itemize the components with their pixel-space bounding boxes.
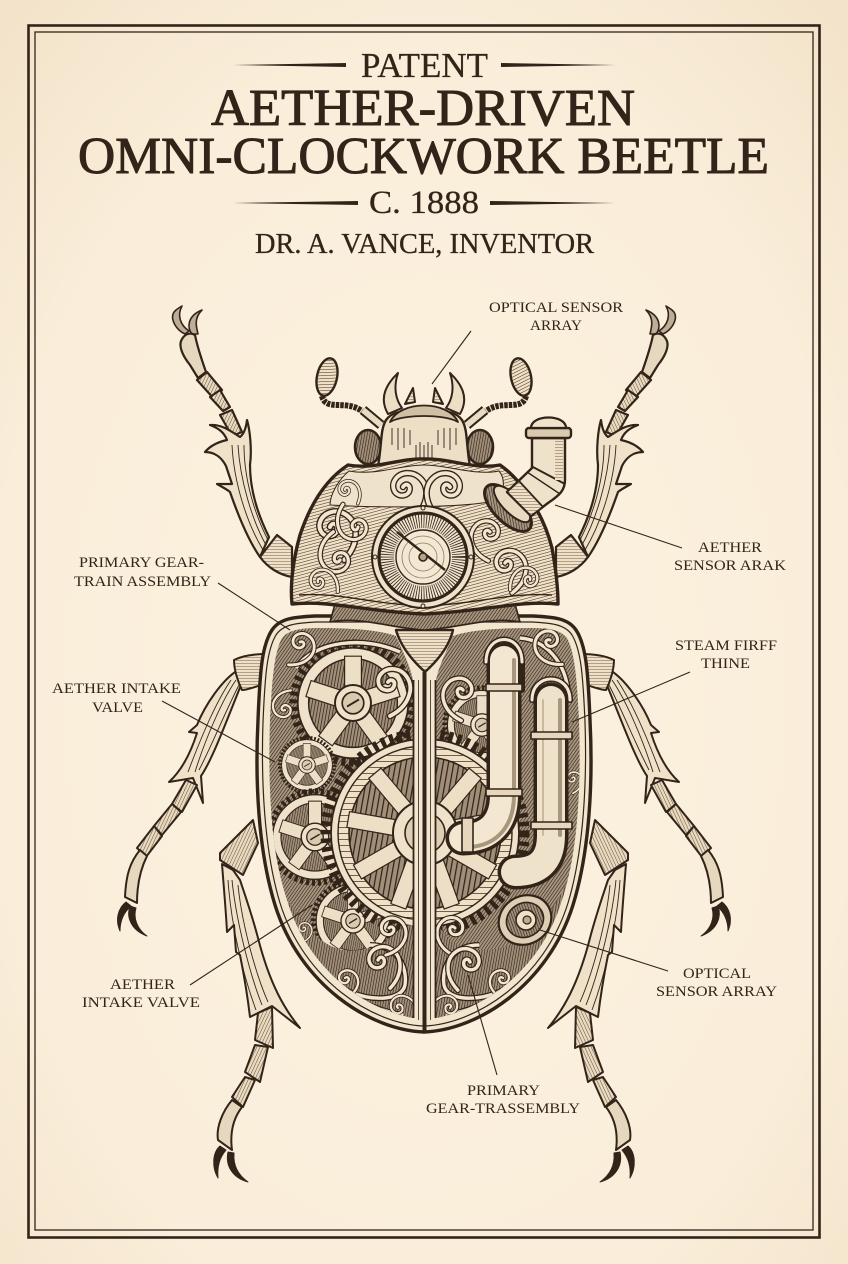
callout: optical sensor array (top): ARRAY [530,318,582,334]
gears [270,644,524,960]
callout: aether intake valve (lower) [82,905,312,1011]
head [313,356,535,466]
callout: primary gear-train assembly: PRIMARY GEAR- [79,555,204,571]
callout: steam thine: STEAM FIRFF [675,638,777,654]
middle left leg [118,654,267,936]
steam pipes [463,640,570,872]
scutellum [396,630,453,672]
callout: steam thine [572,638,777,722]
title line one: AETHER-DRIVEN [211,80,635,137]
eyes [355,430,381,464]
inventor: DR. A. VANCE, INVENTOR [255,229,594,260]
callout: aether intake valve (upper) [52,681,275,762]
elytra shell [257,616,591,1032]
title line two: OMNI-CLOCKWORK BEETLE [78,128,769,185]
callout: primary gear assembly (bottom): PRIMARY [467,1083,540,1099]
filigree scrolls [308,470,540,598]
bottom scroll work [270,627,582,1018]
shell outline [257,616,591,1032]
callout: aether sensor array [555,505,786,574]
callout: primary gear assembly (bottom): GEAR-TRASSEMBLY [426,1101,580,1117]
pronotum shell [291,459,558,614]
front pipe [477,418,571,539]
decorative rules [233,63,615,205]
callout: primary gear-train assembly [74,555,290,630]
callout: primary gear assembly (bottom) [426,975,580,1117]
pipe bands [462,684,572,852]
callout: aether sensor array: SENSOR ARAK [674,558,786,574]
spiral boiler [498,894,552,946]
date: C. 1888 [369,185,479,221]
right legs [548,306,730,1182]
mandibles [384,373,464,414]
callout: aether sensor array: AETHER [698,540,762,556]
callout: aether intake valve (upper): VALVE [92,700,143,716]
left legs [118,306,300,1182]
elytra mechanical interior [269,628,580,1018]
antennae [313,356,535,425]
pressure gauge [372,506,474,608]
patent heading: PATENT [361,46,488,85]
rear left leg [214,820,300,1182]
callout: optical sensor array (lower): SENSOR ARRAY [656,984,777,1000]
callout: aether intake valve (lower): INTAKE VALVE [82,995,200,1011]
callout: primary gear-train assembly: TRAIN ASSEMBLY [74,574,211,590]
central seam [413,672,436,1032]
callout: optical sensor array (top) [432,300,623,384]
callout: aether intake valve (lower): AETHER [110,977,175,993]
callout: steam thine: THINE [701,656,750,672]
head capsule [378,411,470,466]
front left leg [173,306,292,577]
neck band [330,604,520,630]
callout: aether intake valve (upper): AETHER INTAKE [52,681,181,697]
callout: optical sensor array (lower) [540,930,777,1000]
callout: optical sensor array (top): OPTICAL SENSOR [489,300,623,316]
callout: optical sensor array (lower): OPTICAL [683,966,751,982]
title block [78,46,769,260]
beetle illustration [118,306,730,1182]
